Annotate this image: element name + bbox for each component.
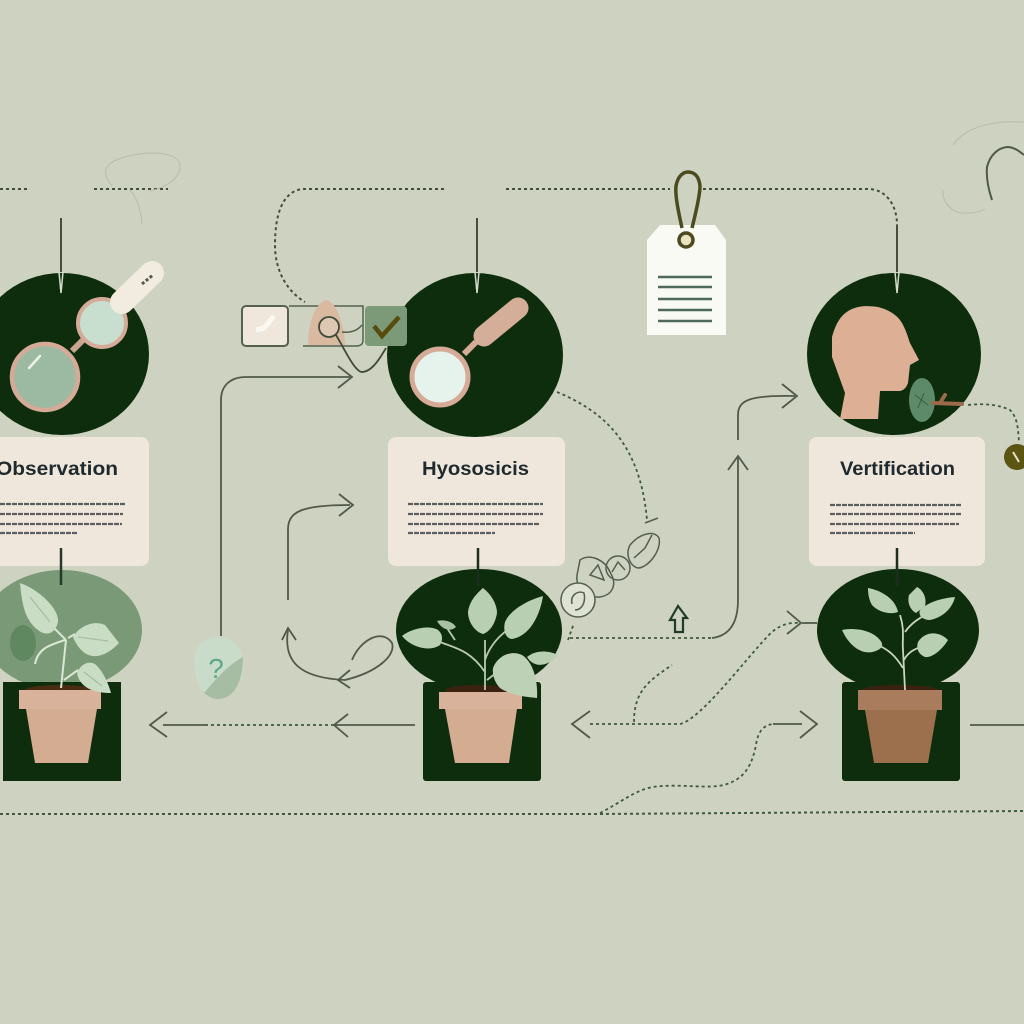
pointer line	[475, 218, 479, 293]
card	[388, 437, 565, 566]
heading: Hyososicis	[422, 459, 529, 480]
heading: Vertification	[840, 459, 955, 480]
icon: potted plant	[817, 569, 979, 781]
pointer line	[59, 218, 63, 293]
text lines	[408, 504, 543, 533]
icon: small up arrow	[670, 606, 687, 632]
panel: hypothesis	[387, 218, 565, 781]
card	[809, 437, 985, 566]
arrow: plant loop	[287, 630, 393, 680]
arrow heads on dashed paths	[572, 611, 801, 738]
icon: potted plant	[396, 569, 562, 781]
stem connector	[60, 548, 62, 585]
bottom dashed line	[0, 811, 1024, 814]
decorative squiggle left	[106, 153, 180, 224]
icon: chain of small leaf circles	[561, 518, 659, 617]
arrow: right of last pot	[970, 724, 1024, 726]
top dashed connectors	[0, 189, 897, 302]
stem connector	[477, 548, 479, 586]
panel: verification	[807, 225, 985, 781]
icon: dark circle with head	[807, 273, 981, 435]
icon: potted plant	[0, 570, 142, 781]
icon: small check badge	[1004, 444, 1024, 470]
pointer line	[895, 225, 899, 293]
icon: question bubble: ?	[208, 653, 224, 684]
arrow: lower row left	[335, 724, 415, 726]
icon: dark circle with magnifier	[387, 273, 563, 437]
arrows: process connectors	[150, 366, 1024, 738]
arrow: lower row left head	[163, 724, 205, 726]
icon: dark circle with magnifiers	[0, 273, 153, 435]
arrow: loop to card	[288, 505, 350, 600]
arrow: short link into plant	[802, 622, 817, 624]
stem connector	[896, 548, 898, 586]
decorative squiggle right	[943, 122, 1024, 213]
checklist icons	[242, 300, 407, 372]
arrow: lower right S end	[773, 723, 802, 725]
icon: hanging tag	[647, 172, 726, 335]
arrow: up then right to hypothesis	[221, 377, 350, 636]
panel: observation	[0, 218, 153, 781]
card	[0, 437, 149, 566]
dashed process arrows	[205, 392, 1019, 813]
icon: question bubble	[194, 637, 243, 699]
text lines	[0, 504, 126, 533]
text lines	[830, 505, 962, 533]
arrow: up to verification	[712, 458, 738, 638]
